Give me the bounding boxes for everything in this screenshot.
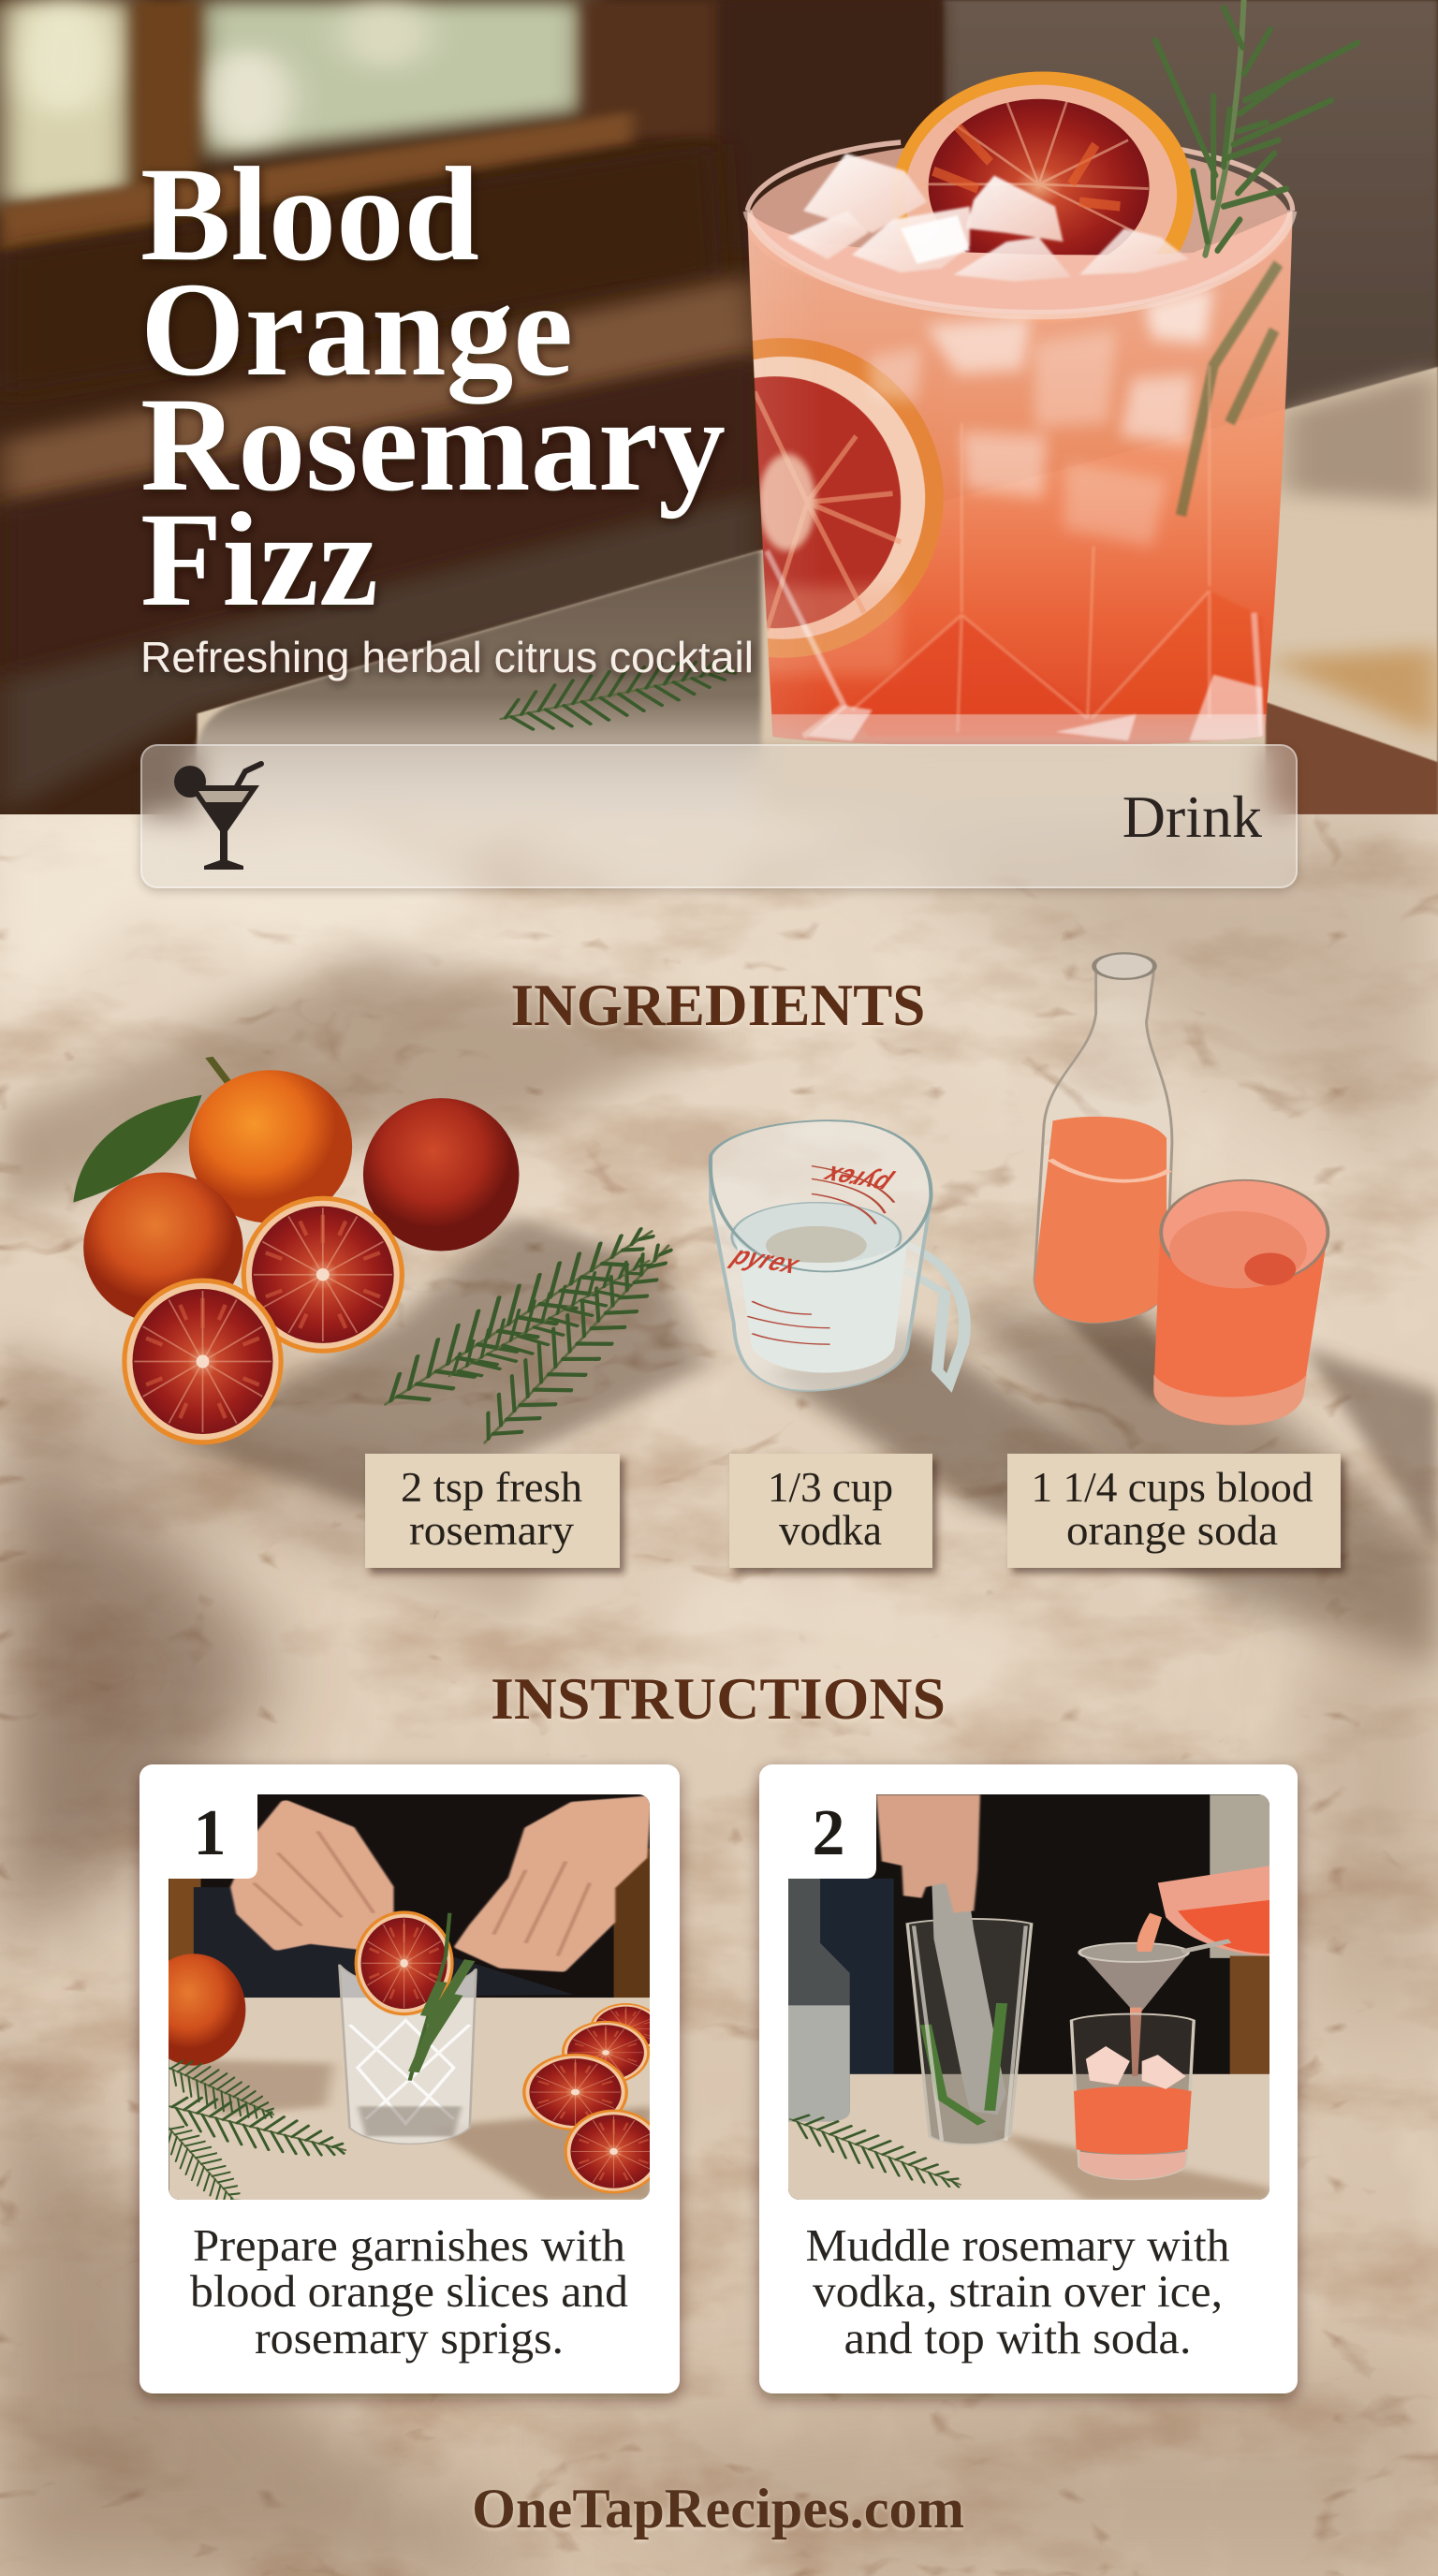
hands	[236, 1799, 646, 1969]
bottle	[788, 1879, 850, 2121]
footer website: OneTapRecipes.com	[472, 2478, 964, 2539]
label: rosemary: 2 tsp fresh	[401, 1464, 582, 1511]
title	[140, 140, 726, 635]
hand	[876, 1794, 980, 1913]
icon: martini glass	[174, 761, 264, 870]
glass interior	[747, 148, 1290, 298]
step 1 text: rosemary sprigs.	[255, 2312, 564, 2364]
crystal glass	[339, 1965, 477, 2144]
step card 2	[759, 1764, 1298, 2393]
step 1 number: 1	[193, 1797, 227, 1869]
title: Rosemary	[140, 371, 726, 520]
orange slice garnish	[892, 72, 1194, 323]
hero photo	[0, 0, 1438, 815]
label: rosemary: rosemary	[409, 1507, 575, 1554]
sprig on counter	[499, 661, 738, 731]
step 2 text: vodka, strain over ice,	[813, 2265, 1223, 2317]
blood oranges	[73, 1057, 519, 1445]
category label: Drink	[1123, 783, 1262, 850]
title: Blood	[140, 140, 479, 289]
cocktail glass	[743, 0, 1360, 744]
step card 1	[139, 1764, 680, 2393]
object shadows	[174, 1215, 1220, 1581]
label: vodka: 1/3 cup	[768, 1464, 893, 1511]
label: rosemary	[365, 1454, 620, 1568]
drink category panel	[140, 744, 1298, 888]
measuring cup: pyrex	[816, 1161, 899, 1197]
step 1 badge	[169, 1794, 257, 1879]
drink surface in front of the slice	[747, 211, 1293, 315]
rosemary garnish	[1155, 0, 1357, 255]
soda bottle	[1034, 953, 1172, 1323]
strainer	[1079, 1952, 1190, 2016]
step 2 text: Muddle rosemary with	[805, 2219, 1230, 2271]
step 2 photo	[785, 1794, 1271, 2201]
ingredients illustrations	[73, 953, 1328, 1581]
step 2 badge	[788, 1794, 876, 1879]
rosemary sprigs	[371, 1208, 688, 1461]
step 1 text: Prepare garnishes with	[193, 2219, 625, 2271]
wall	[941, 0, 1438, 410]
label: vodka	[729, 1454, 932, 1568]
label: soda	[1007, 1454, 1341, 1568]
window	[0, 0, 943, 815]
title: Fizz	[140, 486, 378, 635]
step 1 text: blood orange slices and	[190, 2265, 628, 2317]
sunken rosemary	[1181, 264, 1278, 516]
serving glass	[1071, 2014, 1194, 2179]
soda tumbler	[1153, 1180, 1328, 1425]
ice cubes in the liquid	[868, 285, 1213, 547]
label: soda: 1 1/4 cups blood	[1032, 1464, 1313, 1511]
label: soda: orange soda	[1066, 1507, 1278, 1554]
step 1 photo	[141, 1794, 664, 2218]
step 2 number: 2	[813, 1797, 844, 1869]
counter	[198, 367, 1438, 815]
ingredients heading: INGREDIENTS	[511, 973, 925, 1038]
marble background	[0, 805, 1438, 2576]
label: vodka: vodka	[779, 1507, 882, 1554]
instructions heading: INSTRUCTIONS	[491, 1666, 946, 1732]
measuring cup: pyrex	[725, 1242, 807, 1279]
step 2 text: and top with soda.	[844, 2312, 1191, 2364]
measuring cup	[711, 1120, 964, 1391]
title: Orange	[140, 256, 573, 404]
cut crystal facets	[767, 365, 1262, 737]
ice at the top	[787, 154, 1189, 282]
pouring bottle	[1158, 1866, 1269, 1956]
mixing glass	[907, 1919, 1032, 2144]
subtitle: Refreshing herbal citrus cocktail	[140, 633, 754, 681]
inner orange slice	[623, 338, 944, 675]
